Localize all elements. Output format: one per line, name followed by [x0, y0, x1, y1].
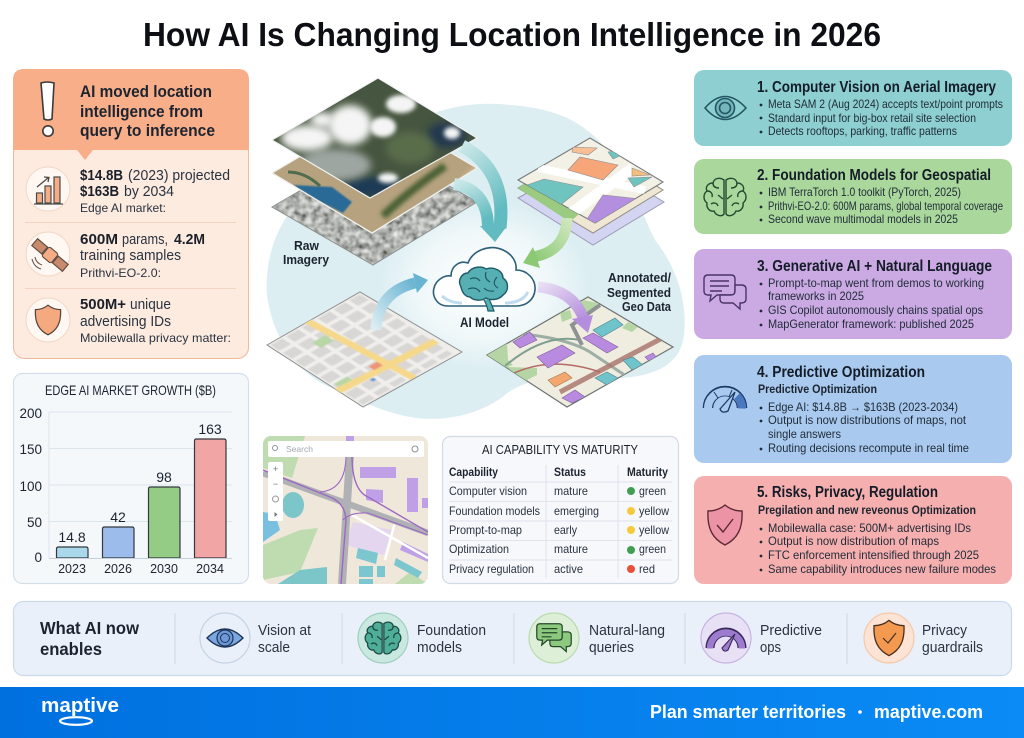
- y axis labels: 100: [19, 479, 42, 494]
- table rows: [449, 484, 669, 576]
- label: annotated geo data: [607, 270, 672, 314]
- bar value labels: 14.8: [58, 529, 86, 545]
- stat: edge AI market: (2023) projected: [128, 168, 230, 184]
- table rows: yellow: [639, 523, 669, 537]
- label: annotated geo data: Annotated/: [608, 270, 671, 285]
- table rows: mature: [554, 542, 588, 556]
- item: privacy guardrails: guardrails: [922, 640, 983, 656]
- item: vision at scale: [200, 613, 311, 663]
- y axis labels: 200: [19, 406, 42, 421]
- table header: Capability: [449, 465, 498, 479]
- panel: risks and regulation: [694, 476, 1012, 584]
- stat: edge AI market: [26, 167, 230, 215]
- annotated layer stack: [518, 138, 664, 245]
- bar value labels: 98: [156, 469, 172, 485]
- arrow: raw imagery to model: [454, 146, 507, 242]
- item: privacy guardrails: [864, 613, 983, 663]
- heading and bullets: Output is now distributions of maps, not: [768, 413, 967, 427]
- heading and bullets: Second wave multimodal models in 2025: [768, 212, 958, 226]
- stat: Prithvi model: Prithvi-EO-2.0:: [80, 266, 161, 280]
- x axis labels: 2034: [196, 562, 224, 576]
- map search bar: [268, 441, 424, 457]
- stat: Mobilewalla privacy: [26, 297, 231, 345]
- heading and bullets: Edge AI: $14.8B → $163B (2023-2034): [768, 400, 958, 414]
- icon: shield check: [708, 505, 742, 545]
- strip heading: enables: [40, 639, 102, 659]
- table rows: early: [554, 523, 577, 537]
- icon: exclamation mark: [41, 82, 54, 136]
- heading and bullets: Prompt-to-map went from demos to working: [768, 276, 984, 290]
- tagline: maptive.com: [874, 702, 983, 722]
- table header: [449, 465, 668, 479]
- y axis labels: 150: [19, 442, 42, 457]
- heading and bullets: 5. Risks, Privacy, Regulation: [757, 484, 938, 501]
- table rows: Prompt-to-map: [449, 523, 522, 537]
- label: annotated geo data: Segmented: [607, 285, 671, 300]
- table rows: mature: [554, 484, 588, 498]
- heading and bullets: [757, 167, 1003, 226]
- bar value labels: 163: [198, 421, 222, 437]
- heading and bullets: Same capability introduces new failure modes: [768, 562, 996, 576]
- icon: chat bubbles: [704, 275, 746, 309]
- panel: computer vision: [694, 70, 1012, 146]
- table rows: Optimization: [449, 542, 509, 556]
- stat: Mobilewalla privacy: 500M+: [80, 297, 126, 313]
- item: foundation models: [358, 613, 486, 663]
- heading and bullets: Output is now distribution of maps: [768, 534, 939, 548]
- panel: generative AI: [694, 249, 1012, 339]
- heading and bullets: [757, 79, 1003, 138]
- table rows: green: [639, 542, 666, 556]
- stat: Prithvi model: 600M: [80, 232, 118, 248]
- stat: Mobilewalla privacy: Mobilewalla privacy matter:: [80, 331, 231, 345]
- stat: Mobilewalla privacy: advertising IDs: [80, 314, 171, 330]
- panel: what AI now enables: [14, 602, 1012, 676]
- heading and bullets: Predictive Optimization: [758, 382, 877, 396]
- bar value labels: 42: [110, 509, 126, 525]
- imagery stack: terrain layer: [271, 152, 478, 234]
- heading and bullets: single answers: [768, 427, 841, 441]
- map layer: raw street map: [263, 290, 462, 409]
- heading and bullets: GIS Copilot autonomously chains spatial ops: [768, 303, 983, 317]
- item: predictive ops: Predictive: [760, 623, 822, 639]
- stat: edge AI market: Edge AI market:: [80, 201, 166, 215]
- x axis labels: 2026: [104, 562, 132, 576]
- table header: Maturity: [627, 465, 668, 479]
- imagery stack: cloud layer: [272, 78, 477, 198]
- stat: edge AI market: by 2034: [124, 184, 174, 200]
- item: predictive ops: ops: [760, 640, 781, 656]
- icon: gauge: [708, 390, 742, 412]
- label: annotated geo data: Geo Data: [622, 299, 672, 314]
- table title: AI CAPABILITY VS MATURITY: [482, 442, 638, 457]
- stat: Prithvi model: params,: [122, 232, 168, 248]
- y axis labels: [19, 406, 42, 565]
- takeaway heading: AI moved location: [80, 82, 212, 101]
- heading and bullets: Mobilewalla case: 500M+ advertising IDs: [768, 521, 971, 535]
- takeaway heading: [80, 82, 215, 140]
- chart title: EDGE AI MARKET GROWTH ($B): [45, 382, 216, 398]
- bars: [56, 439, 226, 558]
- table rows: active: [554, 562, 583, 576]
- table rows: green: [639, 484, 666, 498]
- label: raw imagery: Raw: [294, 238, 320, 253]
- heading and bullets: 4. Predictive Optimization: [757, 364, 925, 381]
- table rows: Foundation models: [449, 504, 540, 518]
- label: raw imagery: [283, 238, 330, 267]
- table rows: Privacy regulation: [449, 562, 534, 576]
- heading and bullets: 3. Generative AI + Natural Language: [757, 258, 992, 275]
- label: AI model: AI Model: [460, 315, 509, 330]
- arrow: street map to model: [376, 273, 428, 330]
- title: How AI Is Changing Location Intelligence in 2026: [143, 16, 881, 53]
- panel: capability table: [442, 436, 678, 584]
- panel: foundation models: [694, 159, 1012, 234]
- stat: Prithvi model: [26, 232, 205, 280]
- heading and bullets: [757, 258, 992, 331]
- table rows: red: [639, 562, 655, 576]
- icon: brain: [704, 178, 746, 216]
- heading and bullets: [757, 364, 969, 455]
- map zoom controls: [268, 462, 283, 521]
- heading and bullets: MapGenerator framework: published 2025: [768, 317, 974, 331]
- logo: maptive: maptive: [41, 695, 119, 717]
- stat: edge AI market: $163B: [80, 184, 119, 200]
- table rows: emerging: [554, 504, 599, 518]
- arrow: model to segmented map: [538, 287, 593, 333]
- tagline: [650, 702, 983, 722]
- heading and bullets: Routing decisions recompute in real time: [768, 441, 969, 455]
- table header: Status: [554, 465, 586, 479]
- item: foundation models: models: [417, 640, 462, 656]
- panel: bar chart: [14, 374, 248, 584]
- map zoom controls: +: [273, 464, 278, 474]
- stat: Mobilewalla privacy: unique: [130, 297, 171, 313]
- heading and bullets: Standard input for big-box retail site selection: [768, 111, 976, 125]
- map search bar: Search: [286, 444, 313, 454]
- heading and bullets: Detects rooftops, parking, traffic patterns: [768, 124, 957, 138]
- strip heading: What AI now: [40, 618, 139, 638]
- table rows: Computer vision: [449, 484, 527, 498]
- item: natural-language queries: [529, 613, 665, 663]
- imagery stack: city layer: [271, 186, 476, 266]
- x axis labels: 2030: [150, 562, 178, 576]
- heading and bullets: FTC enforcement intensified through 2025: [768, 548, 979, 562]
- table rows: yellow: [639, 504, 669, 518]
- item: vision at scale: scale: [258, 640, 290, 656]
- item: privacy guardrails: Privacy: [922, 623, 968, 639]
- map zoom controls: −: [273, 479, 278, 489]
- x axis labels: 2023: [58, 562, 86, 576]
- icon: eye: [705, 96, 746, 120]
- heading and bullets: [757, 484, 996, 576]
- background blob: [267, 104, 685, 419]
- bar value labels: [58, 421, 222, 545]
- heading and bullets: Pregilation and new reveonus Optimization: [758, 503, 976, 517]
- stat: Prithvi model: training samples: [80, 248, 181, 264]
- takeaway heading: intelligence from: [80, 102, 203, 121]
- heading and bullets: frameworks in 2025: [768, 289, 864, 303]
- stat: edge AI market: $14.8B: [80, 168, 123, 184]
- takeaway heading: query to inference: [80, 121, 215, 140]
- item: predictive ops: [701, 613, 822, 663]
- map layer: segmented geo data: [487, 297, 673, 407]
- panel: map UI screenshot: [263, 436, 428, 585]
- item: foundation models: Foundation: [417, 623, 486, 639]
- item: natural-language queries: queries: [589, 640, 634, 656]
- item: vision at scale: Vision at: [258, 623, 311, 639]
- heading and bullets: IBM TerraTorch 1.0 toolkit (PyTorch, 2025): [768, 185, 961, 199]
- tagline: Plan smarter territories: [650, 702, 846, 722]
- item: natural-language queries: Natural-lang: [589, 623, 665, 639]
- y axis labels: 50: [27, 515, 42, 530]
- y axis labels: 0: [34, 550, 42, 565]
- footer bar: [0, 687, 1024, 738]
- strip heading: [40, 618, 139, 659]
- panel: predictive optimization: [694, 355, 1012, 463]
- x axis labels: [58, 562, 224, 576]
- icon: AI model cloud and brain: [434, 248, 535, 311]
- central workflow diagram: [263, 78, 685, 419]
- stat: Prithvi model: 4.2M: [174, 232, 205, 248]
- arrow: annotated stack to model: [523, 218, 567, 268]
- panel: key takeaway: [13, 69, 249, 358]
- label: raw imagery: Imagery: [283, 252, 330, 267]
